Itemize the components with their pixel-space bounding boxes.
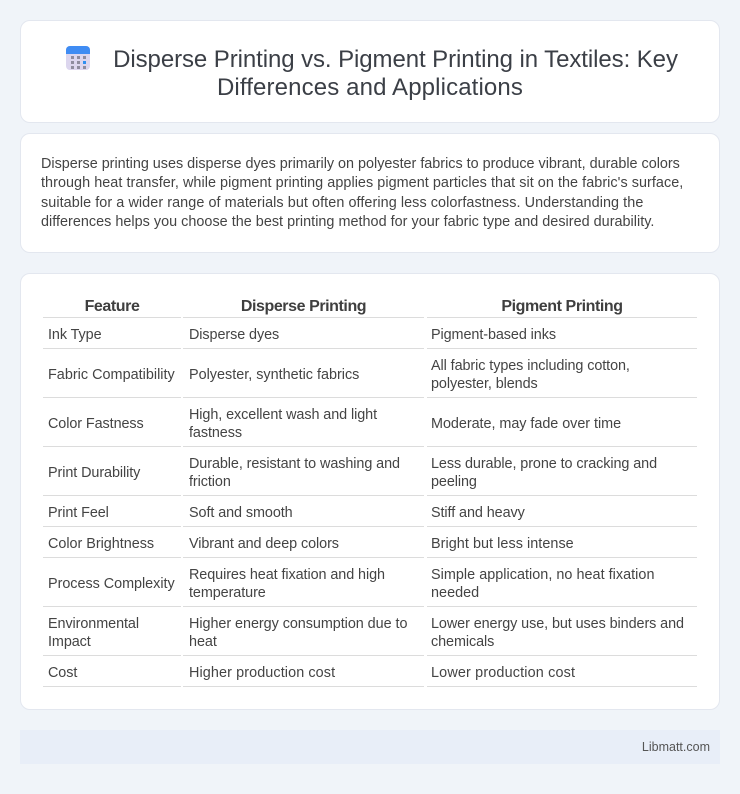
comparison table: Higher energy consumption due to (189, 616, 407, 632)
intro paragraph: through heat transfer, while pigment printing applies pigment particles that sit on the fabric's surface, (41, 175, 683, 191)
comparison table: fastness (189, 425, 242, 441)
intro paragraph (41, 156, 683, 230)
comparison table: Print Feel (48, 505, 109, 521)
comparison table: Lower energy use, but uses binders and (431, 616, 684, 632)
comparison table (43, 298, 697, 687)
table header: Disperse Printing (241, 298, 366, 315)
comparison table: Environmental (48, 616, 139, 632)
comparison table: Requires heat fixation and high (189, 567, 385, 583)
panel: introduction (20, 133, 720, 253)
comparison table: Color Fastness (48, 416, 144, 432)
icon: calendar grid (66, 46, 90, 70)
comparison table: Higher production cost (189, 665, 335, 681)
comparison table: Cost (48, 665, 77, 681)
comparison table: High, excellent wash and light (189, 407, 377, 423)
comparison table: temperature (189, 585, 266, 601)
intro paragraph: suitable for a wider range of materials but often offering less colorfastness. Understanding the (41, 195, 643, 211)
comparison table: peeling (431, 474, 477, 490)
comparison table: Disperse dyes (189, 327, 279, 343)
intro paragraph: Disperse printing uses disperse dyes primarily on polyester fabrics to produce vibrant, durable colors (41, 156, 680, 172)
table header: Feature (85, 298, 139, 315)
comparison table: Durable, resistant to washing and (189, 456, 400, 472)
comparison table: Fabric Compatibility (48, 367, 175, 383)
comparison table: Pigment-based inks (431, 327, 556, 343)
comparison table: Simple application, no heat fixation (431, 567, 654, 583)
comparison table: friction (189, 474, 231, 490)
comparison table: Print Durability (48, 465, 140, 481)
comparison table: Moderate, may fade over time (431, 416, 621, 432)
comparison table: needed (431, 585, 479, 601)
comparison table: Polyester, synthetic fabrics (189, 367, 359, 383)
comparison table: Vibrant and deep colors (189, 536, 339, 552)
comparison table: Process Complexity (48, 576, 175, 592)
intro paragraph: differences helps you choose the best printing method for your fabric type and desired durability. (41, 214, 654, 230)
comparison table: polyester, blends (431, 376, 538, 392)
footer bar (20, 730, 720, 764)
table header (43, 298, 697, 318)
comparison table: heat (189, 634, 217, 650)
comparison table: Soft and smooth (189, 505, 293, 521)
title: Differences and Applications (217, 74, 523, 101)
comparison table: chemicals (431, 634, 494, 650)
comparison table: Stiff and heavy (431, 505, 525, 521)
table header: Pigment Printing (501, 298, 623, 315)
title: Disperse Printing vs. Pigment Printing in Textiles: Key (113, 46, 678, 73)
comparison table: All fabric types including cotton, (431, 358, 630, 374)
title (113, 46, 678, 101)
comparison table: Less durable, prone to cracking and (431, 456, 657, 472)
comparison table: Ink Type (48, 327, 102, 343)
panel: comparison table (20, 273, 720, 710)
panel: title card (20, 20, 720, 123)
footer credit: Libmatt.com (642, 740, 710, 754)
comparison table: Impact (48, 634, 91, 650)
comparison table: Lower production cost (431, 665, 575, 681)
comparison table: Bright but less intense (431, 536, 574, 552)
comparison table: Color Brightness (48, 536, 154, 552)
